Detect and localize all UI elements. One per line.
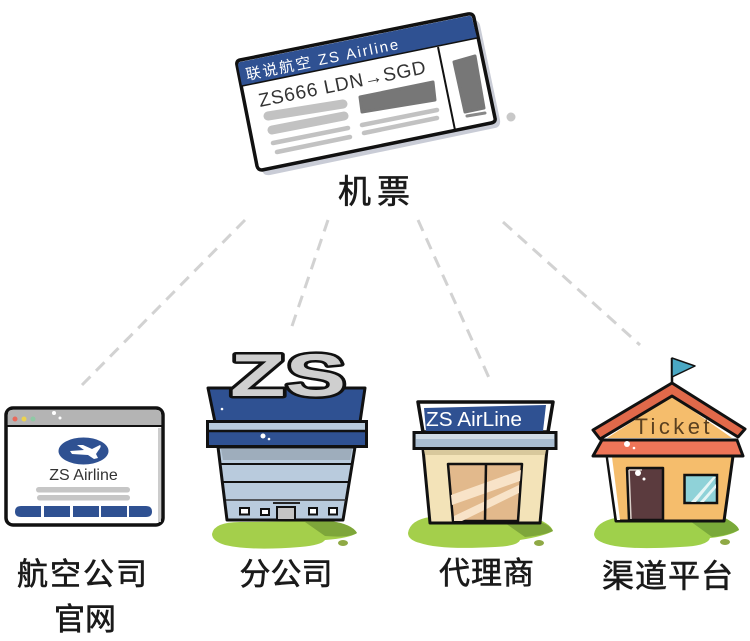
awning band [414, 432, 556, 448]
ground [212, 521, 357, 549]
door [448, 464, 522, 521]
wall [607, 456, 733, 521]
label: airline official website: 航空公司 [17, 557, 149, 592]
icon: airline website browser window [6, 408, 163, 525]
roof gable [607, 396, 732, 438]
roof [593, 383, 745, 439]
icon: ticket booth house [593, 358, 745, 548]
shop sign text: ZS AirLine [426, 409, 522, 431]
label: branch office: 分公司 [240, 557, 332, 592]
dashed connector: ticket to branch office [290, 220, 328, 332]
label: ticket: 机票 [338, 173, 416, 210]
wall [423, 449, 547, 523]
website nav buttons [15, 506, 152, 517]
icon: air ticket [237, 14, 516, 175]
rooftop ZS sign: ZS [230, 342, 346, 409]
ticket flight text: ZS666 LDN→SGD [257, 57, 428, 112]
flag [671, 358, 673, 384]
dashed connector: ticket to channel platform [503, 222, 640, 345]
lower eave [593, 440, 743, 456]
body [218, 447, 355, 520]
ground [408, 517, 553, 548]
door [627, 468, 663, 520]
band [208, 422, 366, 446]
gable text: Ticket [634, 414, 710, 439]
label: channel platform: 渠道平台 [602, 558, 734, 594]
dashed connector: ticket to airline website [82, 220, 245, 385]
label: airline official website line two: 官网 [54, 602, 116, 637]
label: agent: 代理商 [439, 556, 535, 591]
website logo text: ZS Airline [49, 467, 118, 484]
top block [208, 388, 365, 422]
sign [418, 402, 553, 432]
ground [594, 518, 739, 548]
window [684, 475, 717, 503]
icon: agent shop [408, 402, 556, 548]
dashed connector: ticket to agent [418, 220, 490, 380]
icon: branch office building [208, 342, 366, 549]
ticket header text: 联说航空 ZS Airline [244, 36, 400, 84]
logo: airplane badge [58, 438, 108, 464]
